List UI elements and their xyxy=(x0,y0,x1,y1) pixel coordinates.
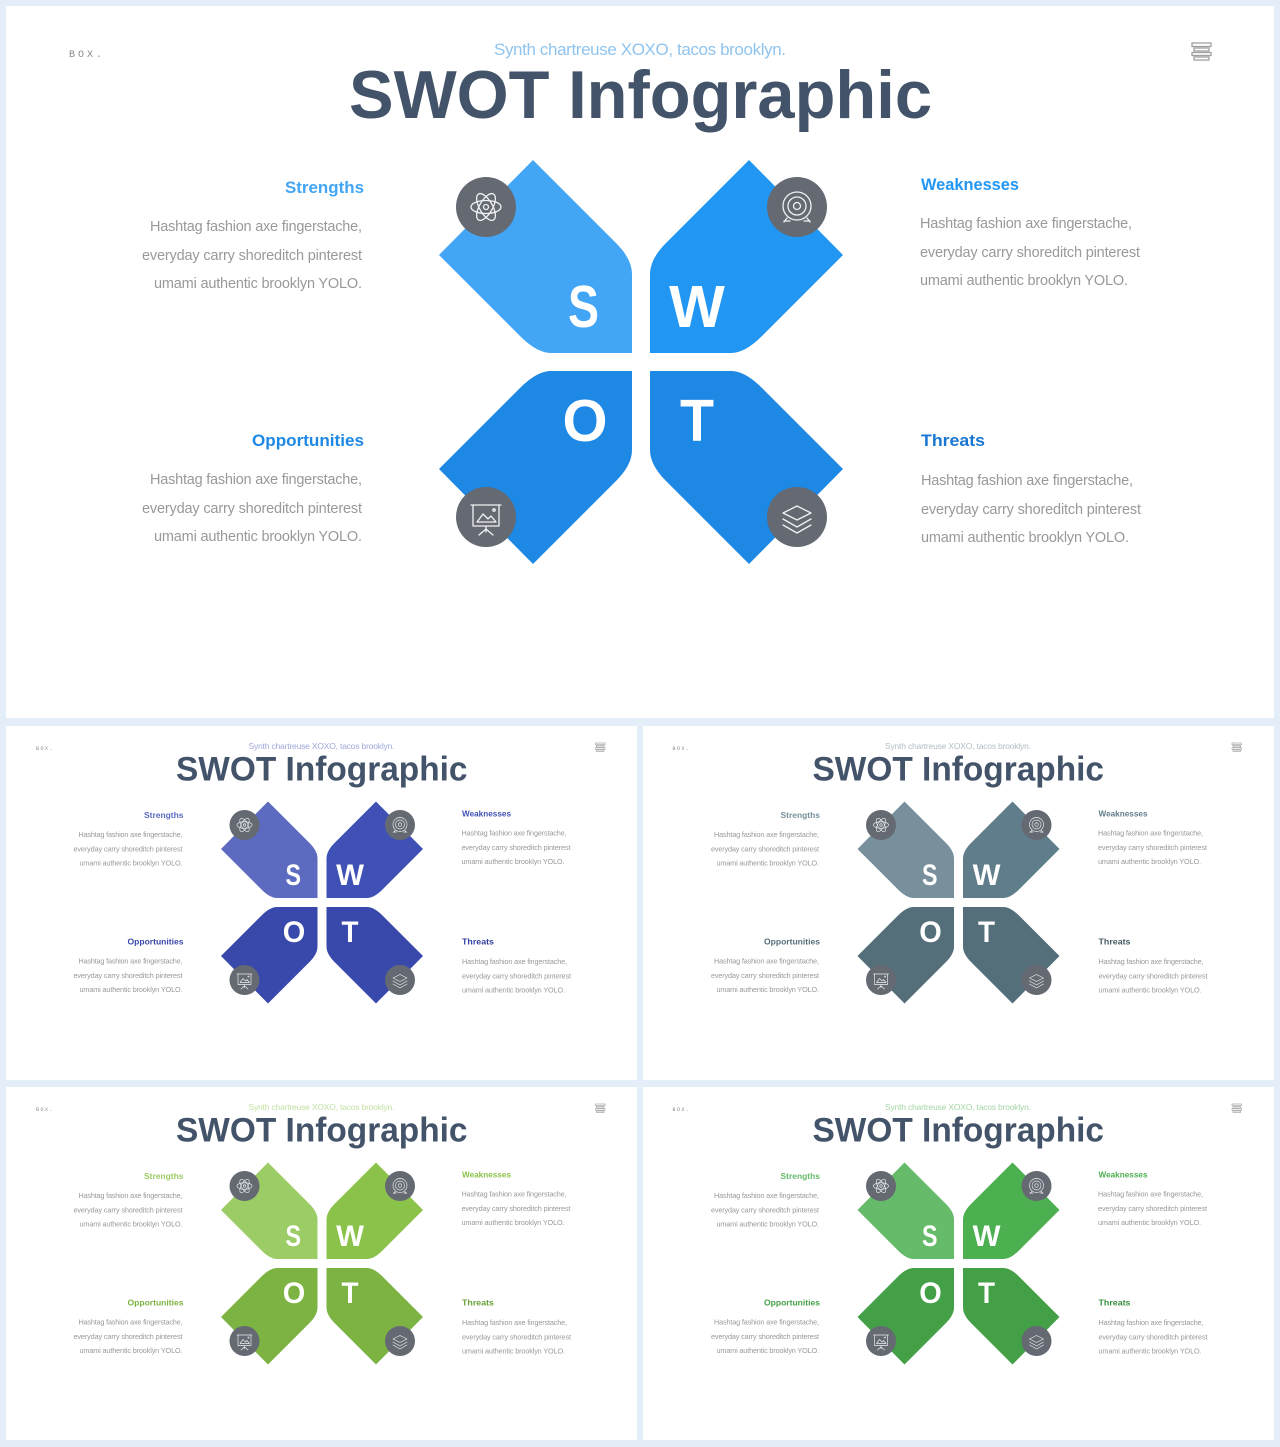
icon: atom xyxy=(230,810,260,840)
text block: threats: umami authentic brooklyn YOLO. xyxy=(462,986,565,994)
petal O xyxy=(858,1268,954,1364)
text block: weaknesses: umami authentic brooklyn YOLO. xyxy=(462,1218,564,1227)
text block: opportunities: Hashtag fashion axe fingerstache, xyxy=(714,1318,819,1326)
text block: threats xyxy=(1098,1298,1208,1356)
text block: opportunities: everyday carry shoreditch pinterest xyxy=(74,971,182,980)
panel: slate slide xyxy=(643,726,1274,1080)
menu icon xyxy=(596,1104,605,1112)
icon: presentation xyxy=(230,965,260,995)
text block: opportunities: everyday carry shoreditch pinterest xyxy=(711,971,819,980)
text block: strengths: Hashtag fashion axe fingerstache, xyxy=(714,1191,819,1200)
title: SWOT Infographic xyxy=(176,1112,468,1150)
text block: weaknesses: Hashtag fashion axe fingerstache, xyxy=(462,828,566,838)
text block: threats: umami authentic brooklyn YOLO. xyxy=(1098,986,1202,994)
text block: opportunities: everyday carry shoreditch pinterest xyxy=(74,1332,182,1341)
text block: strengths xyxy=(711,810,820,868)
text block: strengths: everyday carry shoreditch pinterest xyxy=(74,844,182,854)
logo: BOX. xyxy=(69,50,102,61)
text block: threats: Hashtag fashion axe fingerstache, xyxy=(1098,1318,1204,1327)
text block: strengths xyxy=(711,1171,820,1228)
text block: weaknesses xyxy=(1098,1170,1207,1227)
petal T xyxy=(963,907,1060,1004)
text block: threats: Hashtag fashion axe fingerstache, xyxy=(462,957,567,966)
petal T: T xyxy=(680,388,714,454)
text block: weaknesses: umami authentic brooklyn YOLO. xyxy=(462,857,564,866)
text block: strengths: umami authentic brooklyn YOLO. xyxy=(716,858,819,868)
logo: BOX. xyxy=(672,1107,689,1113)
text block: weaknesses: umami authentic brooklyn YOLO. xyxy=(1098,857,1201,866)
text block: strengths: everyday carry shoreditch pinterest xyxy=(74,1206,182,1214)
menu icon xyxy=(596,743,605,752)
text block: threats: Threats xyxy=(921,431,985,450)
text block: opportunities: Opportunities xyxy=(128,936,184,946)
petal O xyxy=(439,371,632,564)
petal W: W xyxy=(973,1220,1001,1253)
petal T xyxy=(650,371,843,564)
text block: strengths xyxy=(142,178,364,292)
petal W: W xyxy=(973,859,1001,892)
petal W: W xyxy=(669,274,725,340)
petal S: S xyxy=(922,859,938,892)
text block: strengths: Strengths xyxy=(285,178,364,197)
icon: target xyxy=(1022,810,1052,840)
text block: weaknesses: everyday carry shoreditch pinterest xyxy=(462,843,570,852)
text block: threats: Threats xyxy=(462,1298,494,1308)
subtitle: Synth chartreuse XOXO, tacos brooklyn. xyxy=(885,741,1031,751)
petal S xyxy=(858,802,954,898)
text block: weaknesses: Hashtag fashion axe fingerstache, xyxy=(1098,1190,1203,1198)
text block: opportunities: umami authentic brooklyn YOLO. xyxy=(80,985,182,994)
text block: weaknesses: Weaknesses xyxy=(1098,808,1148,818)
text block: threats xyxy=(921,431,1141,546)
text block: opportunities xyxy=(142,431,364,545)
text block: strengths: Strengths xyxy=(780,810,820,820)
logo: BOX. xyxy=(36,746,52,752)
icon: atom xyxy=(230,1171,260,1201)
petal W xyxy=(963,1162,1060,1259)
icon: presentation xyxy=(866,965,896,995)
subtitle: Synth chartreuse XOXO, tacos brooklyn. xyxy=(248,1102,394,1112)
text block: strengths: umami authentic brooklyn YOLO. xyxy=(80,858,182,868)
text block: opportunities: everyday carry shoreditch pinterest xyxy=(142,501,362,517)
text block: opportunities: everyday carry shoreditch pinterest xyxy=(711,1332,819,1341)
petal W xyxy=(963,802,1060,898)
text block: threats: everyday carry shoreditch pinterest xyxy=(921,502,1141,518)
panel: main blue slide xyxy=(6,6,1274,718)
text block: threats: Hashtag fashion axe fingerstache, xyxy=(1098,957,1204,966)
text block: threats: Threats xyxy=(1098,936,1131,946)
icon: presentation xyxy=(866,1326,896,1356)
text block: threats xyxy=(462,1298,571,1356)
title: SWOT Infographic xyxy=(812,750,1104,788)
petal T: T xyxy=(978,1277,995,1310)
panel: lime slide xyxy=(6,1087,637,1440)
text block: weaknesses xyxy=(1098,808,1207,866)
text block: threats xyxy=(1098,936,1208,994)
text block: strengths: Hashtag fashion axe fingerstache, xyxy=(714,830,819,839)
petal W xyxy=(326,1162,423,1259)
text block: strengths: Hashtag fashion axe fingerstache, xyxy=(78,830,182,839)
petal S xyxy=(221,1162,318,1259)
text block: threats: umami authentic brooklyn YOLO. xyxy=(921,530,1129,546)
icon: layers xyxy=(1022,965,1052,995)
icon: atom xyxy=(866,810,896,840)
text block: weaknesses: everyday carry shoreditch pinterest xyxy=(1098,1204,1207,1213)
petal O: O xyxy=(562,388,608,454)
icon: target xyxy=(385,1171,415,1201)
text block: opportunities xyxy=(711,936,820,994)
petal T xyxy=(963,1268,1060,1364)
text block: threats: Hashtag fashion axe fingerstache, xyxy=(462,1318,567,1327)
text block: opportunities: Hashtag fashion axe fingerstache, xyxy=(150,472,362,488)
text block: opportunities: Opportunities xyxy=(128,1298,184,1308)
text block: weaknesses xyxy=(462,808,570,866)
text block: strengths: umami authentic brooklyn YOLO. xyxy=(716,1220,819,1228)
text block: threats: everyday carry shoreditch pinterest xyxy=(462,972,571,980)
petal O: O xyxy=(919,916,942,949)
petal W xyxy=(650,160,843,353)
text block: opportunities: Opportunities xyxy=(764,1298,820,1308)
text block: opportunities: umami authentic brooklyn YOLO. xyxy=(716,985,819,994)
text block: weaknesses xyxy=(462,1170,570,1227)
logo: BOX. xyxy=(672,746,689,752)
text block: strengths: Hashtag fashion axe fingerstache, xyxy=(78,1191,182,1200)
icon: layers xyxy=(385,1326,415,1356)
text block: opportunities: umami authentic brooklyn YOLO. xyxy=(154,529,362,545)
petal S: S xyxy=(922,1220,938,1253)
text block: strengths: everyday carry shoreditch pinterest xyxy=(142,248,362,264)
icon: atom xyxy=(866,1171,896,1201)
icon: target xyxy=(385,810,415,840)
text block: opportunities xyxy=(711,1298,820,1355)
text block: threats xyxy=(462,936,571,994)
text block: strengths: Hashtag fashion axe fingerstache, xyxy=(150,219,362,235)
menu icon xyxy=(1232,1104,1242,1112)
text block: threats: everyday carry shoreditch pinterest xyxy=(1098,1332,1208,1342)
petal O xyxy=(858,907,954,1004)
text block: strengths: everyday carry shoreditch pinterest xyxy=(711,1206,819,1214)
icon: target xyxy=(767,177,827,237)
petal O: O xyxy=(283,916,305,949)
icon: presentation xyxy=(230,1326,260,1356)
icon: layers xyxy=(1022,1326,1052,1356)
petal T xyxy=(326,1268,423,1364)
icon: presentation xyxy=(456,487,516,547)
logo: BOX. xyxy=(36,1107,52,1113)
text block: weaknesses: Weaknesses xyxy=(462,1170,511,1180)
text block: strengths: Strengths xyxy=(780,1171,820,1181)
text block: weaknesses: umami authentic brooklyn YOLO. xyxy=(920,273,1128,289)
text block: weaknesses xyxy=(920,175,1140,289)
text block: strengths xyxy=(74,1171,184,1228)
title: SWOT Infographic xyxy=(812,1112,1104,1150)
petal T: T xyxy=(342,916,358,949)
text block: strengths: Strengths xyxy=(144,1171,184,1181)
text block: threats: umami authentic brooklyn YOLO. xyxy=(462,1346,565,1356)
title: SWOT Infographic xyxy=(349,57,932,133)
petal S xyxy=(439,160,632,353)
petal O xyxy=(221,907,318,1004)
icon: layers xyxy=(385,965,415,995)
text block: opportunities xyxy=(74,936,184,994)
text block: weaknesses: everyday carry shoreditch pinterest xyxy=(462,1204,570,1213)
text block: threats: umami authentic brooklyn YOLO. xyxy=(1098,1346,1202,1356)
petal S: S xyxy=(568,274,599,340)
petal S xyxy=(858,1162,954,1259)
subtitle: Synth chartreuse XOXO, tacos brooklyn. xyxy=(248,741,394,751)
menu icon xyxy=(1232,743,1242,752)
text block: opportunities: Hashtag fashion axe fingerstache, xyxy=(78,1318,182,1326)
text block: opportunities: Hashtag fashion axe fingerstache, xyxy=(78,956,182,966)
petal S: S xyxy=(286,859,301,892)
text block: threats: Hashtag fashion axe fingerstache, xyxy=(921,473,1133,489)
panel: green slide xyxy=(643,1087,1274,1440)
text block: threats: Threats xyxy=(1098,1298,1131,1308)
panel: indigo slide xyxy=(6,726,637,1080)
petal O: O xyxy=(919,1277,942,1310)
text block: strengths: Strengths xyxy=(144,810,184,820)
text block: opportunities: umami authentic brooklyn YOLO. xyxy=(80,1346,182,1355)
text block: threats: everyday carry shoreditch pinterest xyxy=(462,1332,571,1342)
text block: threats: Threats xyxy=(462,936,494,946)
text block: opportunities: Opportunities xyxy=(764,936,820,946)
petal W xyxy=(326,802,423,898)
petal T xyxy=(326,907,423,1004)
text block: weaknesses: Weaknesses xyxy=(1098,1170,1148,1180)
text block: opportunities: Hashtag fashion axe fingerstache, xyxy=(714,956,819,966)
petal T: T xyxy=(978,916,995,949)
icon: target xyxy=(1022,1171,1052,1201)
text block: threats: everyday carry shoreditch pinterest xyxy=(1098,972,1208,980)
text block: strengths xyxy=(74,810,184,868)
petal O: O xyxy=(283,1277,305,1310)
text block: weaknesses: Weaknesses xyxy=(462,808,511,818)
subtitle: Synth chartreuse XOXO, tacos brooklyn. xyxy=(494,40,786,59)
menu icon xyxy=(1192,43,1211,60)
petal S: S xyxy=(286,1220,301,1253)
text block: strengths: everyday carry shoreditch pinterest xyxy=(711,844,819,854)
text block: opportunities: umami authentic brooklyn YOLO. xyxy=(716,1346,819,1355)
petal W: W xyxy=(336,1220,364,1253)
petal S xyxy=(221,802,318,898)
text block: opportunities: Opportunities xyxy=(252,431,364,450)
petal W: W xyxy=(336,859,364,892)
title: SWOT Infographic xyxy=(176,750,468,788)
text block: weaknesses: everyday carry shoreditch pinterest xyxy=(1098,843,1207,852)
text block: strengths: umami authentic brooklyn YOLO. xyxy=(154,276,362,292)
text block: opportunities xyxy=(74,1298,184,1355)
text block: weaknesses: Weaknesses xyxy=(921,175,1019,194)
text block: weaknesses: Hashtag fashion axe fingerstache, xyxy=(462,1190,566,1198)
icon: layers xyxy=(767,487,827,547)
text block: weaknesses: everyday carry shoreditch pinterest xyxy=(920,245,1140,261)
text block: weaknesses: Hashtag fashion axe fingerstache, xyxy=(1098,828,1203,838)
icon: atom xyxy=(456,177,516,237)
text block: strengths: umami authentic brooklyn YOLO. xyxy=(80,1220,182,1228)
petal T: T xyxy=(342,1277,358,1310)
petal O xyxy=(221,1268,318,1364)
text block: weaknesses: Hashtag fashion axe fingerstache, xyxy=(920,216,1132,232)
text block: weaknesses: umami authentic brooklyn YOLO. xyxy=(1098,1218,1201,1227)
subtitle: Synth chartreuse XOXO, tacos brooklyn. xyxy=(885,1102,1031,1112)
